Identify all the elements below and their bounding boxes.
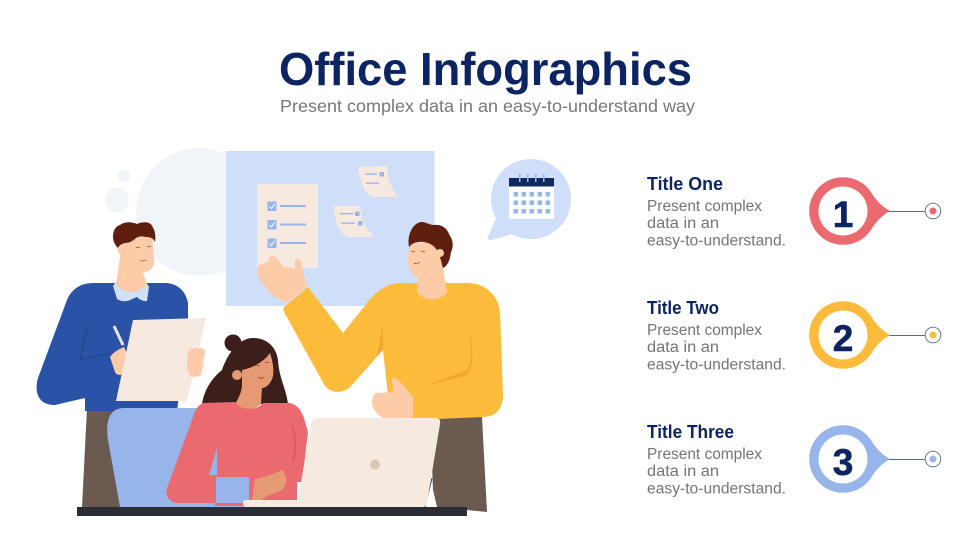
connector	[888, 327, 941, 343]
numbered pin	[809, 425, 890, 493]
sticky note one	[358, 166, 398, 197]
description: easy-to-understand.	[647, 232, 786, 250]
numbered pin: 2	[833, 318, 853, 359]
connector	[888, 203, 941, 219]
item three	[647, 422, 941, 498]
numbered pin: 3	[833, 442, 853, 483]
heading: Title Three: Title Three	[647, 422, 734, 442]
description: data in an	[647, 215, 719, 232]
sticky note two	[334, 206, 374, 237]
laptop	[243, 418, 440, 507]
numbered pin: 1	[833, 194, 853, 235]
description: Present complex	[647, 198, 762, 215]
checklist paper	[257, 184, 318, 268]
thought bubbles	[105, 148, 264, 276]
calendar speech bubble	[488, 159, 571, 240]
illustration: office team	[37, 148, 571, 516]
man on right pants	[430, 417, 487, 512]
board	[226, 151, 434, 306]
description	[647, 198, 786, 250]
description	[647, 446, 786, 498]
heading: Title One: Title One	[647, 174, 723, 194]
description: data in an	[647, 339, 719, 356]
description: easy-to-understand.	[647, 356, 786, 374]
table	[77, 507, 467, 516]
heading: Title Two: Title Two	[647, 298, 719, 318]
man on right	[257, 222, 503, 420]
description: Present complex	[647, 322, 762, 339]
subtitle: Present complex data in an easy-to-understand way	[280, 96, 695, 116]
description: data in an	[647, 463, 719, 480]
numbered pin	[809, 177, 890, 245]
woman	[167, 334, 308, 506]
title: Office Infographics	[279, 43, 692, 95]
blue chair	[107, 408, 250, 507]
connector	[888, 451, 941, 467]
description: easy-to-understand.	[647, 480, 786, 498]
man on left	[37, 222, 206, 507]
numbered pin	[809, 301, 890, 369]
item one	[647, 174, 941, 250]
description	[647, 322, 786, 374]
description: Present complex	[647, 446, 762, 463]
item two	[647, 298, 941, 374]
